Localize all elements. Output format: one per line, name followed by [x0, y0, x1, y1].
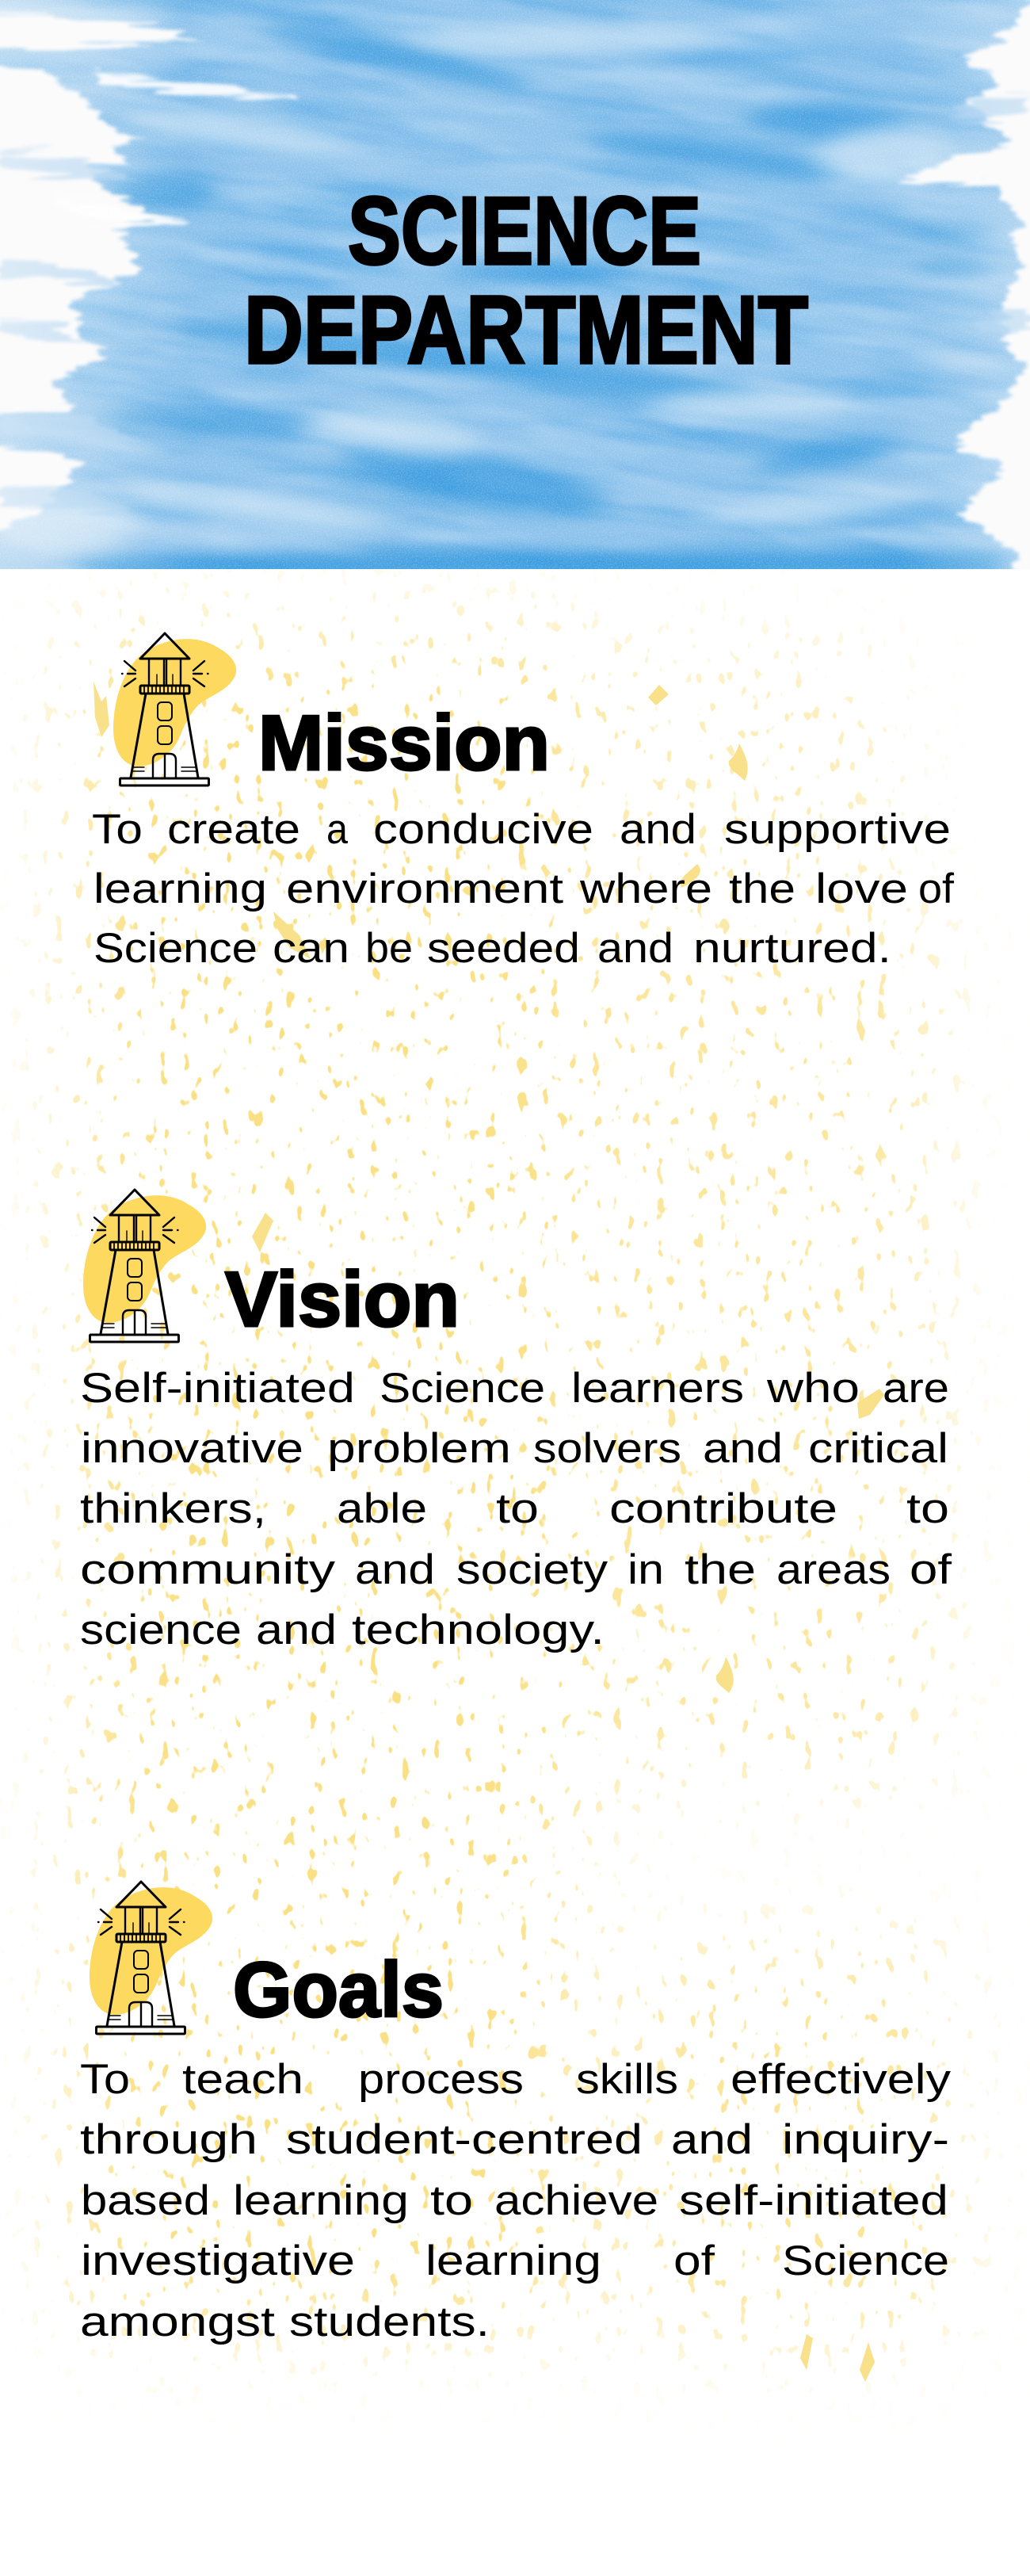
- body text: mission: supportive: [724, 806, 951, 853]
- body text: mission: seeded: [427, 925, 580, 972]
- body text: mission: To: [92, 806, 143, 853]
- white brushed edges: [0, 0, 1030, 587]
- header: watercolor banner: [0, 0, 1030, 569]
- body text: vision: areas: [776, 1546, 891, 1593]
- body text: vision: problem: [327, 1425, 511, 1472]
- heading: mission: Mission: [258, 699, 550, 786]
- body text: mission: of: [918, 866, 954, 912]
- body text: mission: be: [365, 925, 413, 972]
- icon: lighthouse with yellow blob: [83, 1190, 206, 1342]
- body text: goals: student-centred: [286, 2116, 643, 2163]
- body text: vision: innovative: [81, 1425, 303, 1472]
- section: vision: [80, 1190, 952, 1653]
- body text: goals: teach: [182, 2056, 303, 2103]
- section: mission: [92, 633, 954, 972]
- body text: vision: society: [456, 1546, 608, 1593]
- title: SCIENCE: [348, 177, 701, 285]
- body text: vision: technology.: [352, 1607, 605, 1653]
- icon: lighthouse with yellow blob: [90, 1882, 212, 2034]
- body text: mission: environment: [286, 866, 563, 912]
- body text: goals: amongst: [80, 2299, 275, 2345]
- body text: vision: the: [685, 1546, 756, 1593]
- body text: vision: thinkers,: [80, 1485, 266, 1532]
- body text: goals: learning: [425, 2238, 601, 2284]
- body text: mission: learning: [93, 866, 267, 912]
- body text: vision: contribute: [609, 1485, 837, 1532]
- section: goals: [80, 1882, 952, 2345]
- body text: mission: and: [620, 806, 696, 853]
- body text: mission: where: [579, 866, 712, 912]
- body text: goals: to: [430, 2177, 473, 2224]
- body text: vision: and: [256, 1607, 337, 1653]
- body text: mission: create: [167, 806, 300, 853]
- body text: vision: learners: [571, 1365, 744, 1412]
- body text: vision: of: [910, 1546, 952, 1593]
- icon: lighthouse with yellow blob: [113, 633, 236, 785]
- body text: goals: inquiry-: [782, 2116, 949, 2163]
- body text: mission: [92, 806, 954, 972]
- body text: goals: through: [80, 2116, 258, 2163]
- body text: vision: Science: [380, 1365, 545, 1412]
- body text: vision: [80, 1365, 952, 1653]
- title: DEPARTMENT: [244, 276, 808, 384]
- body text: mission: and: [597, 925, 673, 972]
- body text: goals: effectively: [731, 2056, 952, 2103]
- body text: goals: learning: [233, 2177, 409, 2224]
- body text: vision: community: [80, 1546, 336, 1593]
- body text: vision: solvers: [533, 1425, 681, 1472]
- yellow paint splatter background: [3, 569, 1014, 2403]
- body text: vision: and: [703, 1425, 783, 1472]
- body text: vision: Self-initiated: [80, 1365, 355, 1412]
- body text: goals: skills: [576, 2056, 678, 2103]
- body text: goals: process: [358, 2056, 524, 2103]
- body text: vision: are: [883, 1365, 949, 1412]
- body text: vision: to: [906, 1485, 949, 1532]
- body text: goals: [80, 2056, 952, 2345]
- heading: vision: Vision: [225, 1256, 460, 1343]
- body text: vision: science: [80, 1607, 242, 1653]
- body text: vision: able: [337, 1485, 427, 1532]
- body text: mission: conducive: [373, 806, 593, 853]
- body text: vision: critical: [808, 1425, 948, 1472]
- body text: mission: love: [815, 866, 908, 912]
- body text: goals: Science: [782, 2238, 949, 2284]
- body text: goals: based: [81, 2177, 210, 2224]
- body text: vision: and: [355, 1546, 435, 1593]
- body text: mission: can: [273, 925, 349, 972]
- body text: vision: in: [628, 1546, 664, 1593]
- body text: vision: to: [496, 1485, 539, 1532]
- title: [244, 177, 808, 384]
- body text: goals: and: [671, 2116, 753, 2163]
- body text: goals: achieve: [494, 2177, 658, 2224]
- body text: mission: nurtured.: [693, 925, 891, 972]
- body text: goals: of: [673, 2238, 715, 2284]
- body text: goals: investigative: [81, 2238, 355, 2284]
- body text: goals: self-initiated: [679, 2177, 948, 2224]
- body text: vision: who: [766, 1365, 860, 1412]
- body text: mission: the: [729, 866, 795, 912]
- heading: goals: Goals: [233, 1946, 444, 2033]
- body text: mission: a: [326, 806, 348, 853]
- body text: goals: students.: [289, 2299, 490, 2345]
- body text: mission: Science: [93, 925, 258, 972]
- body text: goals: To: [80, 2056, 130, 2103]
